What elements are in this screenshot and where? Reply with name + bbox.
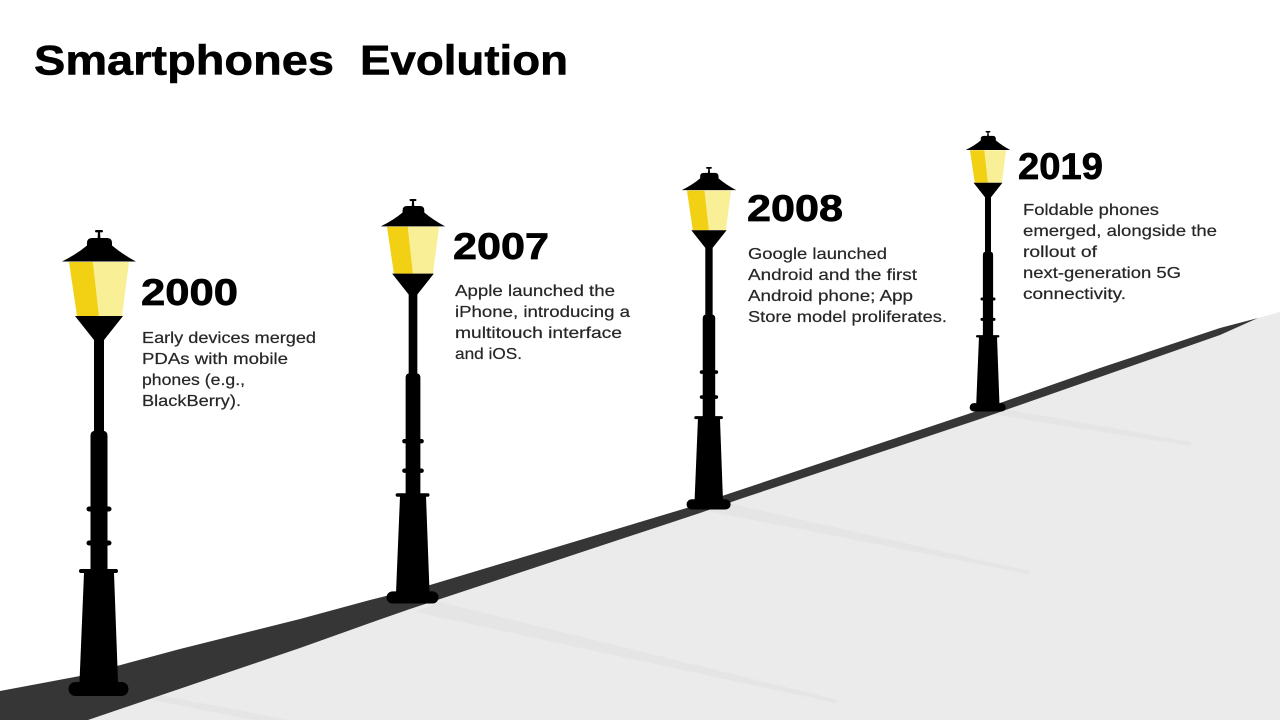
description 2007: multitouch interface bbox=[455, 325, 622, 342]
milestone 2008 bbox=[747, 188, 947, 326]
description 2000: Early devices merged bbox=[142, 330, 316, 347]
description 2019 bbox=[1023, 202, 1217, 303]
description 2000 bbox=[142, 330, 316, 410]
description 2008 bbox=[748, 246, 947, 326]
description 2008: Android and the first bbox=[748, 267, 918, 284]
title: Smartphones bbox=[34, 36, 334, 84]
year 2008: 2008 bbox=[747, 188, 843, 229]
description 2000: PDAs with mobile bbox=[142, 351, 288, 368]
description 2000: BlackBerry). bbox=[142, 393, 241, 410]
lamp post 2019 bbox=[966, 131, 1010, 412]
milestone 2000 bbox=[141, 272, 316, 410]
lamp post 2008 bbox=[682, 167, 736, 510]
description 2007: and iOS. bbox=[455, 346, 522, 363]
pavement bbox=[88, 312, 1280, 720]
description 2007: iPhone, introducing a bbox=[455, 304, 630, 321]
description 2007 bbox=[455, 283, 630, 363]
description 2019: connectivity. bbox=[1023, 286, 1126, 303]
description 2008: Android phone; App bbox=[748, 288, 913, 305]
road bbox=[0, 318, 1258, 720]
lamp post 2007 bbox=[381, 199, 445, 603]
year 2000: 2000 bbox=[141, 272, 238, 313]
description 2008: Store model proliferates. bbox=[748, 309, 947, 326]
lamp shadows bbox=[133, 408, 1192, 720]
description 2008: Google launched bbox=[748, 246, 887, 263]
milestone 2007 bbox=[453, 226, 630, 363]
year 2007: 2007 bbox=[453, 226, 549, 267]
description 2019: rollout of bbox=[1023, 244, 1098, 261]
title bbox=[34, 36, 568, 84]
title: Evolution bbox=[360, 36, 568, 84]
lamp post 2000 bbox=[62, 230, 136, 696]
description 2000: phones (e.g., bbox=[142, 372, 245, 389]
description 2007: Apple launched the bbox=[455, 283, 615, 300]
year 2019: 2019 bbox=[1018, 146, 1103, 187]
milestone 2019 bbox=[1018, 146, 1217, 303]
description 2019: emerged, alongside the bbox=[1023, 223, 1217, 240]
description 2019: Foldable phones bbox=[1023, 202, 1159, 219]
description 2019: next-generation 5G bbox=[1023, 265, 1181, 282]
